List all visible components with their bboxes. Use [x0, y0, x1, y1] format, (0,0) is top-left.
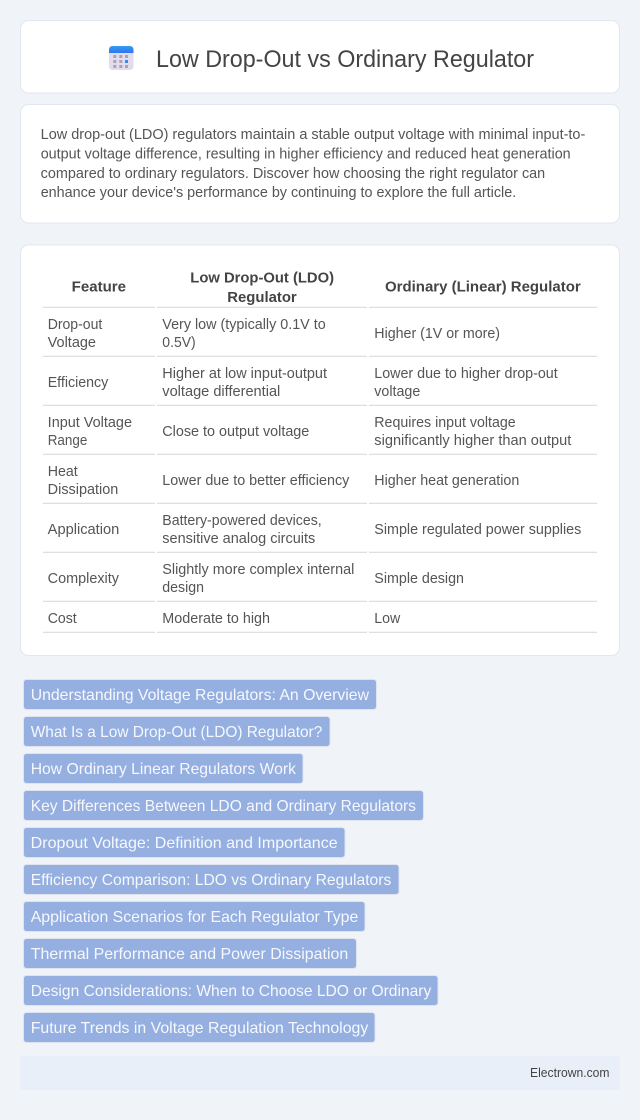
tag: dropout voltage [24, 828, 345, 858]
row: application: sensitive analog circuits [162, 531, 315, 547]
tag: efficiency: Efficiency Comparison: LDO vs Ordinary Regulators [31, 872, 391, 889]
panel: introduction [20, 104, 620, 223]
intro text: compared to ordinary regulators. Discover how choosing the right regulator can [41, 166, 545, 182]
row: heat dissipation [48, 464, 519, 498]
row: efficiency: Lower due to higher drop-out [374, 366, 558, 382]
footer source text: Electrown.com [530, 1066, 610, 1080]
panel: header [20, 20, 620, 93]
intro text: output voltage difference, resulting in higher efficiency and reduced heat generation [41, 146, 571, 162]
tag: overview: Understanding Voltage Regulators: An Overview [31, 687, 369, 704]
row: drop-out voltage: 0.5V) [162, 335, 196, 351]
topic tags list [24, 680, 438, 1042]
table header row: Low Drop-Out (LDO) [190, 271, 334, 287]
intro text [41, 127, 586, 201]
tag: ordinary linear: How Ordinary Linear Regulators Work [31, 761, 297, 778]
table header row [72, 271, 581, 306]
tag: thermal performance: Thermal Performance and Power Dissipation [31, 946, 348, 963]
table header row: Regulator [227, 290, 297, 306]
tag: design considerations: Design Considerations: When to Choose LDO or Ordinary [31, 983, 431, 1000]
row: application [48, 513, 581, 547]
row: complexity [48, 562, 464, 596]
tag: application scenarios: Application Scenarios for Each Regulator Type [31, 909, 358, 926]
row: cost: Low [374, 611, 401, 627]
row: drop-out voltage: Very low (typically 0.1V to [162, 317, 326, 333]
row: complexity: Slightly more complex internal [162, 562, 354, 578]
tag: what is LDO [24, 716, 330, 746]
row: drop-out voltage: Higher (1V or more) [374, 326, 500, 342]
icon: calendar [109, 46, 134, 70]
row: drop-out voltage: Voltage [48, 335, 96, 351]
intro text: Low drop-out (LDO) regulators maintain a stable output voltage with minimal input-to- [41, 127, 586, 143]
row: drop-out voltage: Drop-out [48, 317, 102, 333]
tag: ordinary linear [24, 754, 303, 784]
row: complexity: design [162, 580, 204, 596]
tag: what is LDO: What Is a Low Drop-Out (LDO) Regulator? [31, 724, 322, 741]
row: efficiency: voltage differential [162, 384, 280, 400]
row: efficiency: Higher at low input-output [162, 366, 327, 382]
row: efficiency [48, 366, 558, 400]
table header row: Ordinary (Linear) Regulator [385, 280, 581, 296]
footer [20, 1056, 620, 1090]
row: efficiency: voltage [374, 384, 420, 400]
tag: thermal performance [24, 938, 356, 968]
row: complexity: Complexity [48, 571, 120, 587]
tag: future trends [24, 1012, 375, 1042]
row: application: Simple regulated power supplies [374, 522, 581, 538]
row: application: Battery-powered devices, [162, 513, 322, 529]
row: input voltage range: significantly higher than output [374, 433, 571, 449]
row: heat dissipation: Lower due to better efficiency [162, 473, 350, 489]
table header row: Feature [72, 280, 126, 296]
tag: dropout voltage: Dropout Voltage: Definition and Importance [31, 835, 338, 852]
tag: key differences: Key Differences Between LDO and Ordinary Regulators [31, 798, 416, 815]
title: Low Drop-Out vs Ordinary Regulator [156, 46, 534, 73]
row: input voltage range: Requires input voltage [374, 415, 516, 431]
row: input voltage range: Input Voltage [48, 415, 132, 431]
row: heat dissipation: Higher heat generation [374, 473, 519, 489]
row: input voltage range [48, 415, 571, 449]
tag: design considerations [24, 976, 438, 1006]
row: heat dissipation: Heat [48, 464, 78, 480]
row: cost: Moderate to high [162, 611, 270, 627]
panel: comparison table [20, 245, 620, 656]
row: input voltage range: Range [48, 433, 87, 449]
intro text: enhance your device's performance by continuing to explore the full article. [41, 185, 516, 201]
tag: application scenarios [24, 902, 365, 932]
row: cost: Cost [48, 611, 77, 627]
tag: key differences [24, 790, 424, 820]
row: cost [48, 611, 401, 627]
row: complexity: Simple design [374, 571, 464, 587]
row: efficiency: Efficiency [48, 375, 109, 391]
row: input voltage range: Close to output voltage [162, 424, 309, 440]
row: heat dissipation: Dissipation [48, 482, 118, 498]
tag: future trends: Future Trends in Voltage Regulation Technology [31, 1020, 368, 1037]
row: drop-out voltage [48, 317, 500, 351]
row: application: Application [48, 522, 119, 538]
tag: efficiency [24, 864, 399, 894]
tag: overview [24, 680, 376, 710]
